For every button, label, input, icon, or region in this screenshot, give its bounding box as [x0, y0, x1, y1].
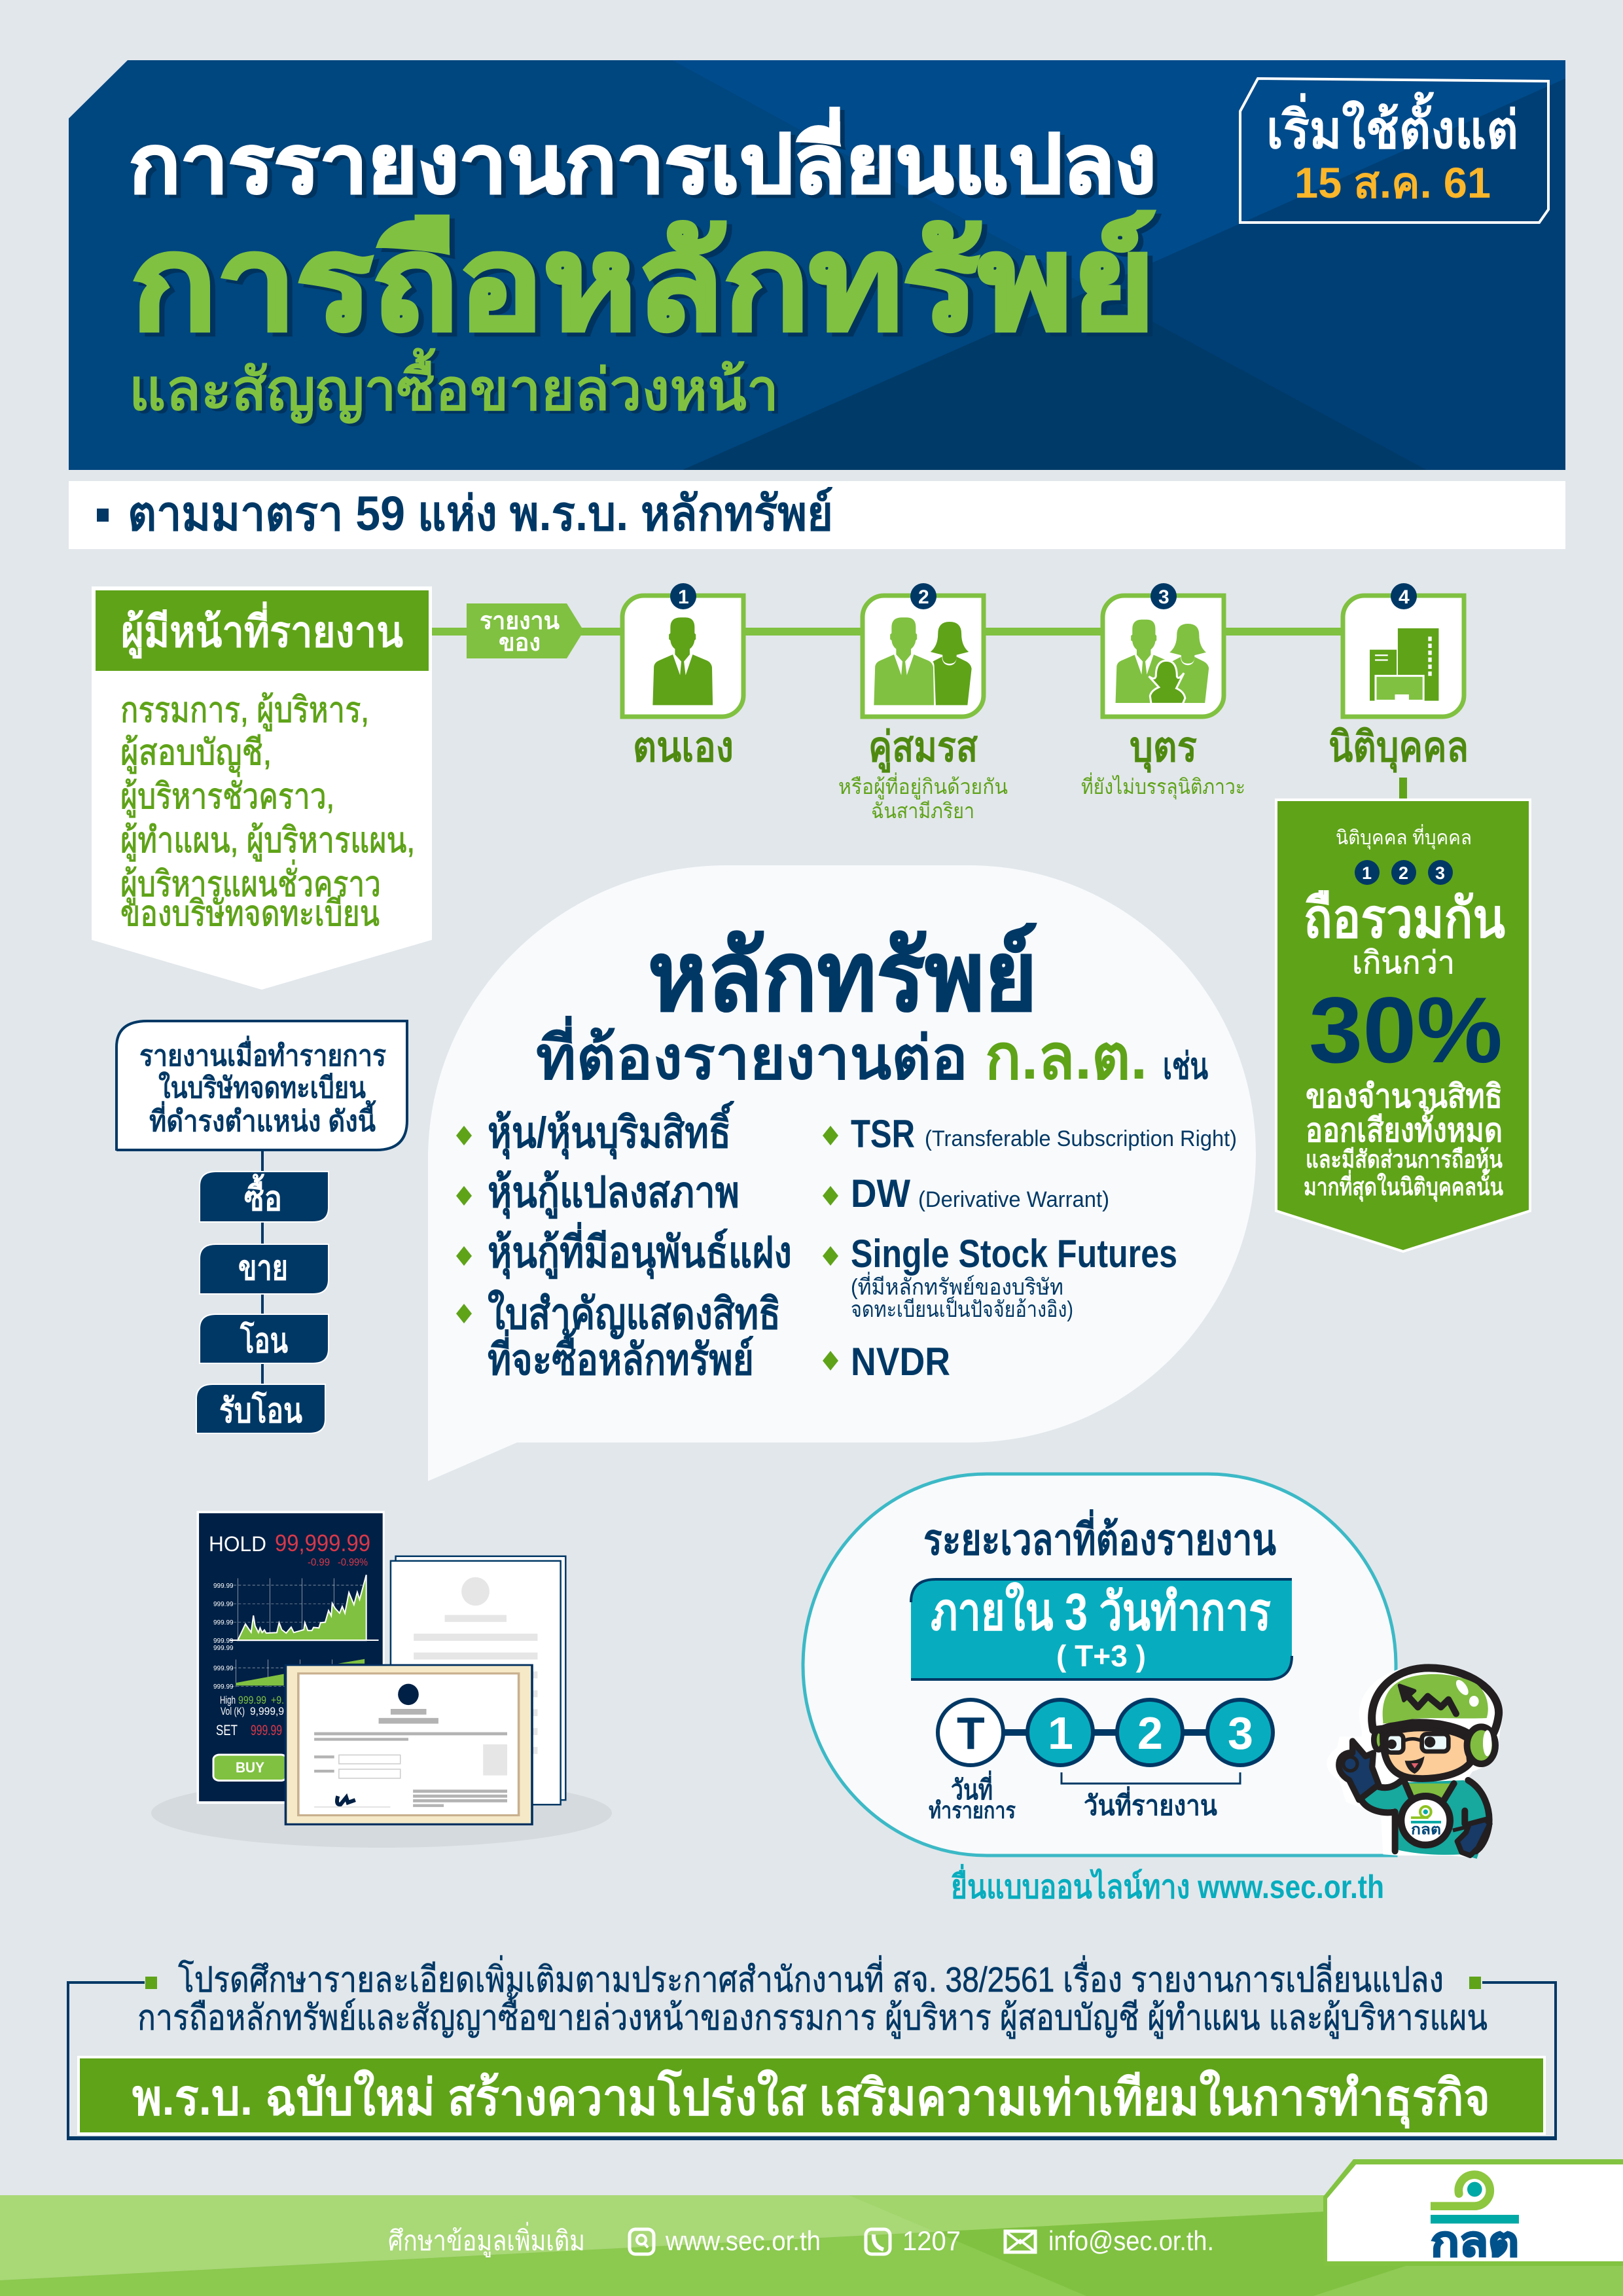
list right: Single Stock Futures [851, 1232, 1177, 1276]
button: sell [200, 1244, 329, 1294]
button: receive transfer [196, 1384, 325, 1433]
notice text: โปรดศึกษารายละเอียดเพิ่มเติมตามประกาศสำนักงานที่ สจ. 38/2561 เรื่อง รายงานการเปลี่ยนแปลง [178, 1955, 1444, 2000]
effective date badge [1240, 79, 1548, 223]
flow: report when transacting: ในบริษัทจดทะเบียน [158, 1071, 366, 1104]
list left: หุ้นกู้แปลงสภาพ [488, 1168, 740, 1219]
list left: หุ้นกู้ที่มีอนุพันธ์แฝง [488, 1221, 792, 1280]
stock screen: 999.99 [213, 1645, 234, 1652]
title line 1: การรายงานการเปลี่ยนแปลง [129, 107, 1156, 210]
bubble heading: ก.ล.ต. [985, 1022, 1147, 1092]
flow: report when transacting [116, 1021, 407, 1433]
subtitle strip [69, 481, 1565, 549]
stock screen: 9,999,9 [250, 1705, 284, 1717]
panel: 30 percent: และมีสัดส่วนการถือหุ้น [1306, 1146, 1503, 1175]
icon: mail [1005, 2231, 1035, 2252]
icon box 4: juristic person [1343, 583, 1464, 717]
stock screen: 999.99 [213, 1665, 234, 1672]
numbered circles [1355, 860, 1453, 885]
label: self: ตนเอง [633, 723, 734, 770]
numbered circles: 3 [1435, 863, 1445, 883]
transaction day label [929, 1770, 1016, 1823]
paper documents [391, 1556, 565, 1804]
stock screen [197, 1511, 385, 1804]
day timeline [938, 1700, 1273, 1765]
panel: 30 percent: มากที่สุดในนิติบุคคลนั้น [1304, 1169, 1503, 1202]
speech bubble: securities [428, 865, 1256, 1481]
mascot [1327, 1664, 1502, 1859]
stock screen: 999.99 [238, 1694, 266, 1706]
list of reporters: กรรมการ, ผู้บริหาร, [120, 691, 369, 731]
label: children: บุตร [1130, 723, 1197, 773]
button: transfer [200, 1314, 329, 1363]
list right: (ที่มีหลักทรัพย์ของบริษัท [851, 1272, 1063, 1300]
icon box 1: self: 1 [678, 586, 689, 608]
panel: duty to report [92, 586, 432, 990]
green slogan bar [79, 2057, 1544, 2134]
stock screen: SET [216, 1722, 238, 1738]
day timeline: 3 [1228, 1708, 1253, 1759]
list left: ที่จะซื้อหลักทรัพย์ [488, 1327, 754, 1384]
list right: DW [851, 1172, 910, 1215]
arrow label: report of: รายงาน [480, 607, 560, 634]
title line 2: การถือหลักทรัพย์ [131, 211, 1155, 357]
label: juristic person: นิติบุคคล [1329, 723, 1469, 773]
button: sell: ขาย [238, 1249, 288, 1287]
teal deadline box: ภายใน 3 วันทำการ [931, 1581, 1271, 1641]
green slogan bar: พ.ร.บ. ฉบับใหม่ สร้างความโปร่งใส เสริมความเท่าเทียมในการทำธุรกิจ [132, 2068, 1490, 2129]
diamond bullets [456, 1126, 838, 1371]
stock screen: HOLD [209, 1532, 266, 1556]
stock screen: +9. [271, 1694, 284, 1706]
list right: (Derivative Warrant) [918, 1187, 1109, 1212]
icon box 2: spouse [863, 583, 984, 717]
teal deadline box [911, 1579, 1292, 1681]
panel: duty to report: ผู้มีหน้าที่รายงาน [121, 601, 403, 659]
bubble heading: เช่น [1163, 1045, 1208, 1086]
mascot: กลต [1411, 1821, 1441, 1838]
certificate [285, 1664, 533, 1825]
teal deadline box: ( T+3 ) [1056, 1639, 1146, 1673]
list left: ใบสำคัญแสดงสิทธิ [488, 1288, 781, 1339]
list of reporters: ผู้ทำแผน, ผู้บริหารแผน, [120, 821, 415, 861]
panel: reporting period: ระยะเวลาที่ต้องรายงาน [923, 1509, 1276, 1564]
title line 3: และสัญญาซื้อขายล่วงหน้า [129, 349, 779, 423]
bubble heading: ที่ต้องรายงานต่อ [536, 1015, 968, 1092]
connector line [425, 628, 1348, 636]
list right: TSR [851, 1112, 915, 1156]
panel: 30 percent: 30% [1309, 978, 1503, 1083]
panel: 30 percent: ถือรวมกัน [1304, 888, 1505, 949]
stock screen: BUY [236, 1759, 264, 1776]
stock screen: 999.99 [213, 1619, 234, 1626]
list right: (Transferable Subscription Right) [925, 1126, 1237, 1151]
transaction day label: วันที่ [951, 1770, 993, 1805]
effective date badge: เริ่มใช้ตั้งแต่ [1266, 92, 1518, 159]
numbered circles: 2 [1399, 863, 1408, 883]
stock screen: 999.99 [251, 1722, 282, 1738]
day timeline: 2 [1137, 1708, 1163, 1759]
flow: report when transacting: รายงานเมื่อทำรายการ [139, 1035, 386, 1072]
stock screen: High [220, 1694, 236, 1706]
arrow label: report of [467, 603, 584, 658]
icon box 3: children: 3 [1158, 586, 1169, 608]
stock screen: -0.99 [308, 1557, 330, 1568]
bubble heading: หลักทรัพย์ [648, 923, 1037, 1031]
icon box 1: self [622, 583, 743, 717]
panel: 30 percent: เกินกว่า [1352, 946, 1455, 980]
icon box 3: children [1103, 583, 1224, 717]
icon: web [630, 2229, 654, 2254]
label: spouse: หรือผู้ที่อยู่กินด้วยกัน [838, 772, 1008, 800]
stock screen: 999.99 [213, 1683, 234, 1691]
flow: report when transacting: ที่ดำรงตำแหน่ง ดังนี้ [149, 1100, 376, 1138]
list left: หุ้น/หุ้นบุริมสิทธิ์ [488, 1101, 735, 1160]
label: spouse: ฉันสามีภริยา [871, 799, 974, 823]
stock screen: 999.99 [213, 1638, 234, 1645]
list right [851, 1112, 1237, 1384]
label: spouse [838, 723, 1008, 823]
stock screen: Vol (K) [221, 1705, 245, 1717]
connector to 30% panel [1399, 778, 1407, 801]
contact text: ศึกษาข้อมูลเพิ่มเติม [388, 2222, 585, 2257]
online filing note: ยื่นแบบออนไลน์ทาง www.sec.or.th [951, 1864, 1384, 1905]
stock screen: 999.99 [213, 1583, 234, 1590]
panel: reporting period [803, 1474, 1396, 1856]
stock screen: -0.99% [338, 1557, 368, 1568]
transaction day label: ทำรายการ [929, 1798, 1016, 1823]
list of reporters: ผู้บริหารแผนชั่วคราว [120, 859, 381, 905]
button: buy [200, 1172, 329, 1222]
contact text [388, 2222, 1214, 2257]
bubble heading [536, 923, 1208, 1092]
panel: 30 percent [1276, 800, 1530, 1251]
list of reporters [120, 691, 415, 933]
footer [0, 2159, 1623, 2296]
logo plate [1323, 2159, 1623, 2266]
title banner [69, 60, 1565, 470]
subtitle strip: ตามมาตรา 59 แห่ง พ.ร.บ. หลักทรัพย์ [128, 486, 833, 541]
logo plate: กลต [1431, 2219, 1519, 2265]
contact text: 1207 [902, 2225, 961, 2256]
bracket [1061, 1772, 1240, 1784]
list left [488, 1101, 792, 1384]
day timeline: T [957, 1708, 985, 1759]
list of reporters: ผู้สอบบัญชี, [120, 733, 272, 774]
button: buy: ซื้อ [244, 1174, 282, 1218]
numbered circles: 1 [1362, 863, 1372, 883]
list right: จดทะเบียนเป็นปัจจัยอ้างอิง) [851, 1296, 1073, 1322]
notice text [137, 1955, 1488, 2039]
label: spouse: คู่สมรส [868, 723, 978, 773]
panel: 30 percent: ของจำนวนสิทธิ [1306, 1078, 1503, 1115]
label: children: ที่ยังไม่บรรลุนิติภาวะ [1081, 772, 1245, 800]
list of reporters: ของบริษัทจดทะเบียน [120, 894, 380, 933]
panel: 30 percent: ออกเสียงทั้งหมด [1306, 1106, 1503, 1149]
icon: phone [866, 2229, 890, 2254]
label: children [1081, 723, 1245, 800]
illustration: trading screen and certificates [151, 1511, 612, 1848]
stock screen: 999.99 [213, 1601, 234, 1608]
icon box 2: spouse: 2 [918, 586, 929, 608]
reporting days label: วันที่รายงาน [1084, 1786, 1217, 1821]
arrow label: report of: ของ [499, 629, 541, 656]
stock screen: 99,999.99 [275, 1530, 370, 1556]
list right: NVDR [851, 1340, 950, 1384]
notice frame [67, 1955, 1557, 2140]
list of reporters: ผู้บริหารชั่วคราว, [120, 772, 334, 817]
panel: 30 percent: นิติบุคคล ที่บุคคล [1336, 824, 1472, 850]
button: transfer: โอน [240, 1320, 288, 1360]
day timeline: 1 [1048, 1708, 1073, 1759]
contact text: www.sec.or.th [665, 2225, 821, 2256]
effective date badge: 15 ส.ค. 61 [1294, 158, 1491, 207]
contact text: info@sec.or.th. [1048, 2225, 1214, 2256]
icon box 4: juristic person: 4 [1399, 586, 1410, 608]
button: receive transfer: รับโอน [219, 1390, 302, 1430]
